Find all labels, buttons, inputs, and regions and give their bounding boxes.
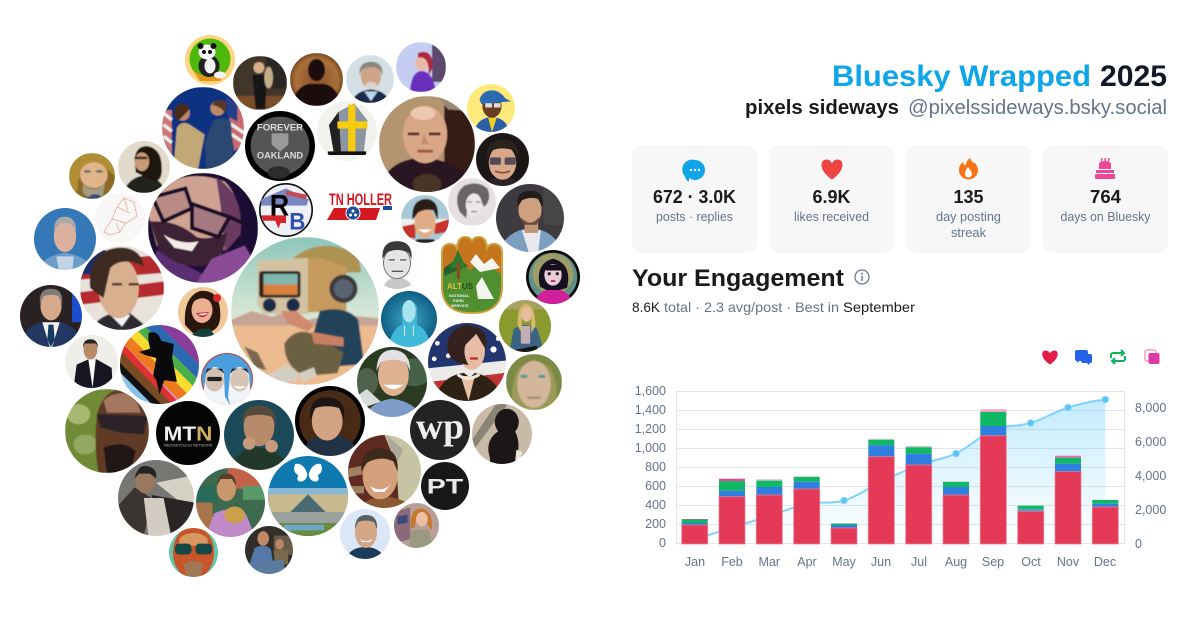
stat card: day posting streak: day posting (936, 210, 1001, 224)
icon: speech bubble (682, 160, 705, 182)
avatar: rainbow Nancy Drew silhouette (120, 325, 199, 404)
avatar: Alt US National Park Service badge (442, 237, 502, 313)
stat card: likes received (769, 145, 894, 253)
legend icon: likes (1042, 350, 1058, 364)
bar: November (1055, 456, 1081, 544)
engagement summary: September (843, 299, 915, 315)
bar: March (756, 479, 782, 544)
avatar: boy with retro TV helmet in desert (231, 237, 379, 385)
stat card: posts and replies: 672 · 3.0K (653, 186, 737, 207)
avatar: smiling bearded man with glasses (148, 173, 258, 283)
header title: Bluesky Wrapped (832, 60, 1091, 93)
avatar: MTN logo: MEIDASTOUCH NETWORK (164, 443, 213, 447)
avatar: red-haired woman (396, 42, 446, 92)
avatar: man on private jet (348, 435, 421, 508)
avatar: blue hoodie figure (381, 291, 437, 347)
avatar: WP logo: wp (416, 406, 464, 447)
stat card: posts and replies (632, 145, 757, 253)
avatar: RB logo: R (270, 190, 289, 222)
stat card: day posting streak: 135 (954, 186, 984, 207)
month labels: Aug (945, 555, 967, 569)
avatar: cartoon man with cap (467, 84, 515, 132)
avatar: bishop mitre (317, 101, 377, 161)
engagement summary: 8.6K (632, 299, 661, 315)
chart legend icons (1042, 350, 1160, 365)
legend icon: replies (1075, 350, 1092, 365)
avatar: RB logo: B (289, 208, 305, 235)
left axis labels: 800 (645, 460, 666, 474)
avatar: Louvre with butterfly (268, 456, 348, 536)
right axis labels: 0 (1135, 537, 1142, 551)
month labels: Dec (1094, 555, 1116, 569)
month labels (685, 555, 1116, 569)
avatar: grey-haired man in suit (346, 55, 394, 103)
legend icon: reposts (1111, 350, 1125, 364)
left axis labels: 1,200 (635, 422, 666, 436)
bar: February (719, 479, 745, 544)
avatar: engraved sketch man (382, 241, 412, 289)
avatar: Alt US National Park Service badge: NATIONAL (449, 293, 470, 298)
stat card: day posting streak: streak (951, 226, 987, 240)
icon: cake (1095, 158, 1115, 179)
grid and axes (676, 391, 1124, 544)
avatar: TN Holler logo: TN HOLLER (329, 190, 392, 209)
left axis labels: 1,600 (635, 384, 666, 398)
avatar: MTN logo: MTN (164, 423, 212, 446)
stacked bars (682, 409, 1118, 544)
bar: December (1092, 500, 1118, 544)
account handle: @pixelssideways.bsky.social (908, 97, 1167, 119)
avatar: woman holding dog (233, 56, 287, 110)
avatar: MTN logo (156, 401, 220, 465)
avatar: PT logo (421, 462, 469, 510)
avatar: man eating burger in market (196, 468, 265, 537)
avatar bubble cluster (20, 35, 580, 579)
avatar: laughing woman with flower (178, 287, 228, 337)
avatar: WP logo (410, 400, 470, 460)
right axis labels: 8,000 (1135, 401, 1166, 415)
avatar: black curly dog (472, 404, 532, 464)
avatar: Alt US National Park Service badge: SERVICE (451, 303, 469, 308)
avatar: woman with green blurred background (506, 354, 562, 410)
avatar: Forever Oakland raiders (245, 111, 315, 181)
avatar: PT logo: PT (427, 476, 463, 499)
left axis labels: 400 (645, 498, 666, 512)
header title: 2025 (1100, 60, 1167, 93)
bar: May (831, 523, 857, 544)
avatar: grey-haired man on blue (34, 208, 96, 270)
icon: heart (822, 160, 842, 180)
avatar: man with black ring (295, 386, 365, 456)
avatar: man in black suit on white (65, 335, 118, 388)
left axis labels: 0 (659, 536, 666, 550)
avatar: Alt US National Park Service badge: ALTUS (447, 282, 474, 291)
month labels: Jul (911, 555, 927, 569)
right axis labels: 2,000 (1135, 503, 1166, 517)
legend icon: quotes (1145, 350, 1160, 364)
avatar: young man with flag (80, 246, 164, 330)
bar: July (906, 446, 932, 544)
left axis labels: 200 (645, 517, 666, 531)
cumulative line (695, 396, 1109, 539)
month labels: Nov (1057, 555, 1080, 569)
month labels: Mar (759, 555, 780, 569)
stat card: likes received: 6.9K (812, 186, 851, 207)
account name: pixels sideways (745, 97, 899, 119)
avatar: girl with flag and orange hair (394, 503, 439, 548)
bar: June (868, 439, 894, 544)
avatar: bald man with microphone (379, 96, 475, 192)
avatar: Alt US National Park Service badge: PARK (453, 298, 464, 303)
avatar: silhouette (290, 53, 343, 106)
avatar: muscular man with blue shirt (245, 526, 293, 574)
avatar: man in green sweater (224, 400, 294, 470)
stat card: posts and replies: posts · replies (656, 210, 733, 224)
avatar: RB logo (259, 183, 313, 237)
right axis labels: 4,000 (1135, 469, 1166, 483)
avatar: pencil sketch woman (448, 178, 496, 226)
stat card: days on Bluesky: days on Bluesky (1060, 210, 1151, 224)
bar: January (682, 519, 708, 544)
month labels: May (832, 555, 857, 569)
month labels: Feb (721, 555, 743, 569)
stat card: days on Bluesky: 764 (1090, 186, 1122, 207)
avatar: man in grey lounge jacket (118, 460, 194, 536)
avatar: woman with short dark hair (401, 195, 449, 243)
month labels: Sep (982, 555, 1004, 569)
cumulative area (695, 400, 1105, 544)
icon: info (855, 270, 869, 284)
avatar: dark-haired woman (118, 141, 170, 193)
avatar: two people shaking hands before flags (162, 87, 244, 169)
left axis labels: 1,400 (635, 403, 666, 417)
avatar: man in navy suit (20, 285, 82, 347)
avatar: red-orange face with sunglasses (169, 528, 218, 577)
engagement summary: total · 2.3 avg/post · Best in (664, 299, 839, 315)
avatar: red line sketch (95, 193, 145, 243)
left axis labels: 1,000 (635, 441, 666, 455)
avatar: panda (185, 35, 235, 85)
month labels: Jan (685, 555, 705, 569)
avatar: man with sunglasses and foliage (65, 389, 149, 473)
bar: August (943, 481, 969, 544)
avatar: smiling older man with white hair (357, 347, 427, 417)
right axis labels: 6,000 (1135, 435, 1166, 449)
stat card: days on Bluesky (1043, 145, 1168, 253)
section heading: Your Engagement (632, 265, 844, 292)
month labels: Oct (1021, 555, 1041, 569)
avatar: man in blue jacket (496, 184, 564, 252)
bar: April (794, 476, 820, 544)
icon: flame (959, 158, 978, 180)
stacked bar and line chart (635, 384, 1166, 569)
avatar: Forever Oakland raiders: OAKLAND (257, 151, 304, 161)
bar: September (980, 409, 1006, 544)
month labels: Apr (797, 555, 817, 569)
stat card: likes received: likes received (794, 210, 869, 224)
avatar: twin men with sunglasses (201, 353, 253, 405)
stat card: day posting streak (906, 145, 1031, 253)
avatar: man with glasses (476, 133, 529, 186)
avatar: TN Holler logo (327, 190, 392, 220)
avatar: illustrated woman on pink (526, 250, 580, 304)
right axis labels (1135, 401, 1166, 551)
avatar: blonde woman with scarf (69, 153, 115, 199)
bar: October (1018, 505, 1044, 544)
avatar: blonde woman in field (499, 300, 551, 352)
avatar: Forever Oakland raiders: FOREVER (257, 123, 304, 133)
avatar: smiling man light background (340, 509, 390, 559)
avatar: woman before US flag (428, 323, 506, 401)
month labels: Jun (871, 555, 891, 569)
left axis labels: 600 (645, 479, 666, 493)
left axis labels (635, 384, 666, 550)
